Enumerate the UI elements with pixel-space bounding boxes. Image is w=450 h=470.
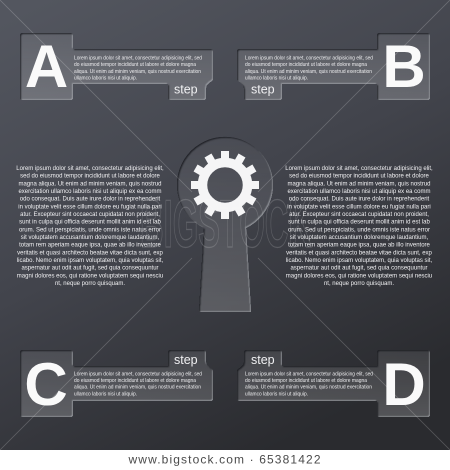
footer strip	[0, 450, 450, 470]
step label D: step	[251, 353, 275, 367]
left text block: orum. Sed ut perspiciatis, unde omnis iste natus error	[19, 227, 161, 233]
right text block: atur. Excepteur sint occaecat cupidatat non proident,	[289, 212, 429, 218]
right text block: orum. Sed ut perspiciatis, unde omnis iste natus error	[288, 227, 430, 233]
footer credit: www.bigstock.com · 65381422	[128, 452, 321, 466]
text block C: do eiusmod tempor incididunt ut labore et dolore magna	[74, 378, 196, 384]
letter A: A	[25, 33, 68, 100]
text block A	[74, 56, 202, 82]
left text block: licabo. Nemo enim ipsam voluptatem, quia voluptas sit,	[17, 258, 164, 264]
panel A	[20, 33, 213, 100]
text block D	[245, 372, 373, 397]
left text block: odo consequat. Duis aute irure dolor in reprehenderit	[20, 197, 161, 203]
left text block: atur. Excepteur sint occaecat cupidatat non proident,	[20, 212, 160, 218]
text block A: ullamco laboris nisi ut aliquip.	[74, 76, 137, 82]
text block B	[245, 56, 373, 82]
left text block: sit voluptatem accusantium doloremque laudantium,	[21, 235, 160, 241]
left text block: veritatis et quasi architecto beatae vitae dicta sunt, exp	[17, 250, 164, 256]
right text block: licabo. Nemo enim ipsam voluptatem, quia voluptas sit,	[286, 258, 433, 264]
text block A: do eiusmod tempor incididunt ut labore et dolore magna	[74, 62, 196, 68]
left text block: magni dolores eos, qui ratione voluptatem sequi nesciu	[17, 273, 163, 279]
left text block: magna aliqua. Ut enim ad minim veniam, quis nostrud	[18, 181, 162, 187]
left text block: sed do eiusmod tempor incididunt ut labore et dolore	[20, 174, 161, 180]
right text block: in voluptate velit esse cillum dolore eu fugiat nulla pari	[287, 204, 431, 210]
text block D: Lorem ipsum dolor sit amet, consectetur adipisicing elit, sed	[245, 372, 373, 378]
letter C: C	[24, 351, 68, 418]
text block B: aliqua. Ut enim ad minim veniam, quis nostrud exercitation	[245, 69, 372, 75]
right text block: odo consequat. Duis aute irure dolor in reprehenderit	[289, 197, 430, 203]
right text block: Lorem ipsum dolor sit amet, consectetur adipisicing elit,	[285, 166, 433, 172]
text block B: ullamco laboris nisi ut aliquip.	[245, 76, 308, 82]
right text block: magni dolores eos, qui ratione voluptatem sequi nesciu	[286, 273, 432, 279]
text block B: do eiusmod tempor incididunt ut labore et dolore magna	[245, 62, 367, 68]
right text block: sed do eiusmod tempor incididunt ut labore et dolore	[289, 174, 430, 180]
step label C: step	[174, 353, 198, 367]
left text block: aspernatur aut odit aut fugit, sed quia consequuntur	[21, 266, 159, 272]
right text block: exercitation ullamco laboris nisi ut aliquip ex ea comm	[287, 189, 431, 195]
right text block: veritatis et quasi architecto beatae vitae dicta sunt, exp	[286, 250, 433, 256]
text block A: aliqua. Ut enim ad minim veniam, quis nostrud exercitation	[74, 69, 201, 75]
left text block: nt, neque porro quisquam.	[55, 281, 125, 287]
left text block: sunt in culpa qui officia deserunt mollit anim id est lab	[19, 220, 161, 226]
letter B: B	[382, 33, 426, 100]
text block D: do eiusmod tempor incididunt ut labore et dolore magna	[245, 378, 367, 384]
letter D: D	[382, 351, 426, 418]
right text block: sunt in culpa qui officia deserunt mollit anim id est lab	[288, 220, 430, 226]
keyhole cut-out with gear	[177, 137, 273, 312]
right text block: totam rem aperiam eaque ipsa, quae ab illo inventore	[288, 243, 431, 249]
left text block: Lorem ipsum dolor sit amet, consectetur adipisicing elit,	[16, 166, 164, 172]
right text block: nt, neque porro quisquam.	[324, 281, 394, 287]
panel B	[237, 33, 430, 100]
left text block	[16, 166, 164, 287]
text block B: Lorem ipsum dolor sit amet, consectetur adipisicing elit, sed	[245, 56, 373, 62]
text block C: ullamco laboris nisi ut aliquip.	[74, 391, 137, 397]
panel C	[20, 350, 213, 418]
text block C	[74, 372, 202, 397]
left text block: exercitation ullamco laboris nisi ut aliquip ex ea comm	[18, 189, 162, 195]
text block A: Lorem ipsum dolor sit amet, consectetur adipisicing elit, sed	[74, 56, 202, 62]
step label B: step	[251, 82, 275, 96]
right text block: magna aliqua. Ut enim ad minim veniam, quis nostrud	[287, 181, 431, 187]
panel D	[237, 350, 430, 418]
step label A: step	[174, 82, 198, 96]
left text block: in voluptate velit esse cillum dolore eu fugiat nulla pari	[18, 204, 162, 210]
left text block: totam rem aperiam eaque ipsa, quae ab illo inventore	[19, 243, 162, 249]
text block C: aliqua. Ut enim ad minim veniam, quis nostrud exercitation	[74, 385, 201, 391]
icon: gear	[191, 151, 259, 219]
text block D: aliqua. Ut enim ad minim veniam, quis nostrud exercitation	[245, 385, 372, 391]
text block C: Lorem ipsum dolor sit amet, consectetur adipisicing elit, sed	[74, 372, 202, 378]
right text block: sit voluptatem accusantium doloremque laudantium,	[290, 235, 429, 241]
right text block	[285, 166, 433, 287]
right text block: aspernatur aut odit aut fugit, sed quia consequuntur	[290, 266, 428, 272]
text block D: ullamco laboris nisi ut aliquip.	[245, 391, 308, 397]
